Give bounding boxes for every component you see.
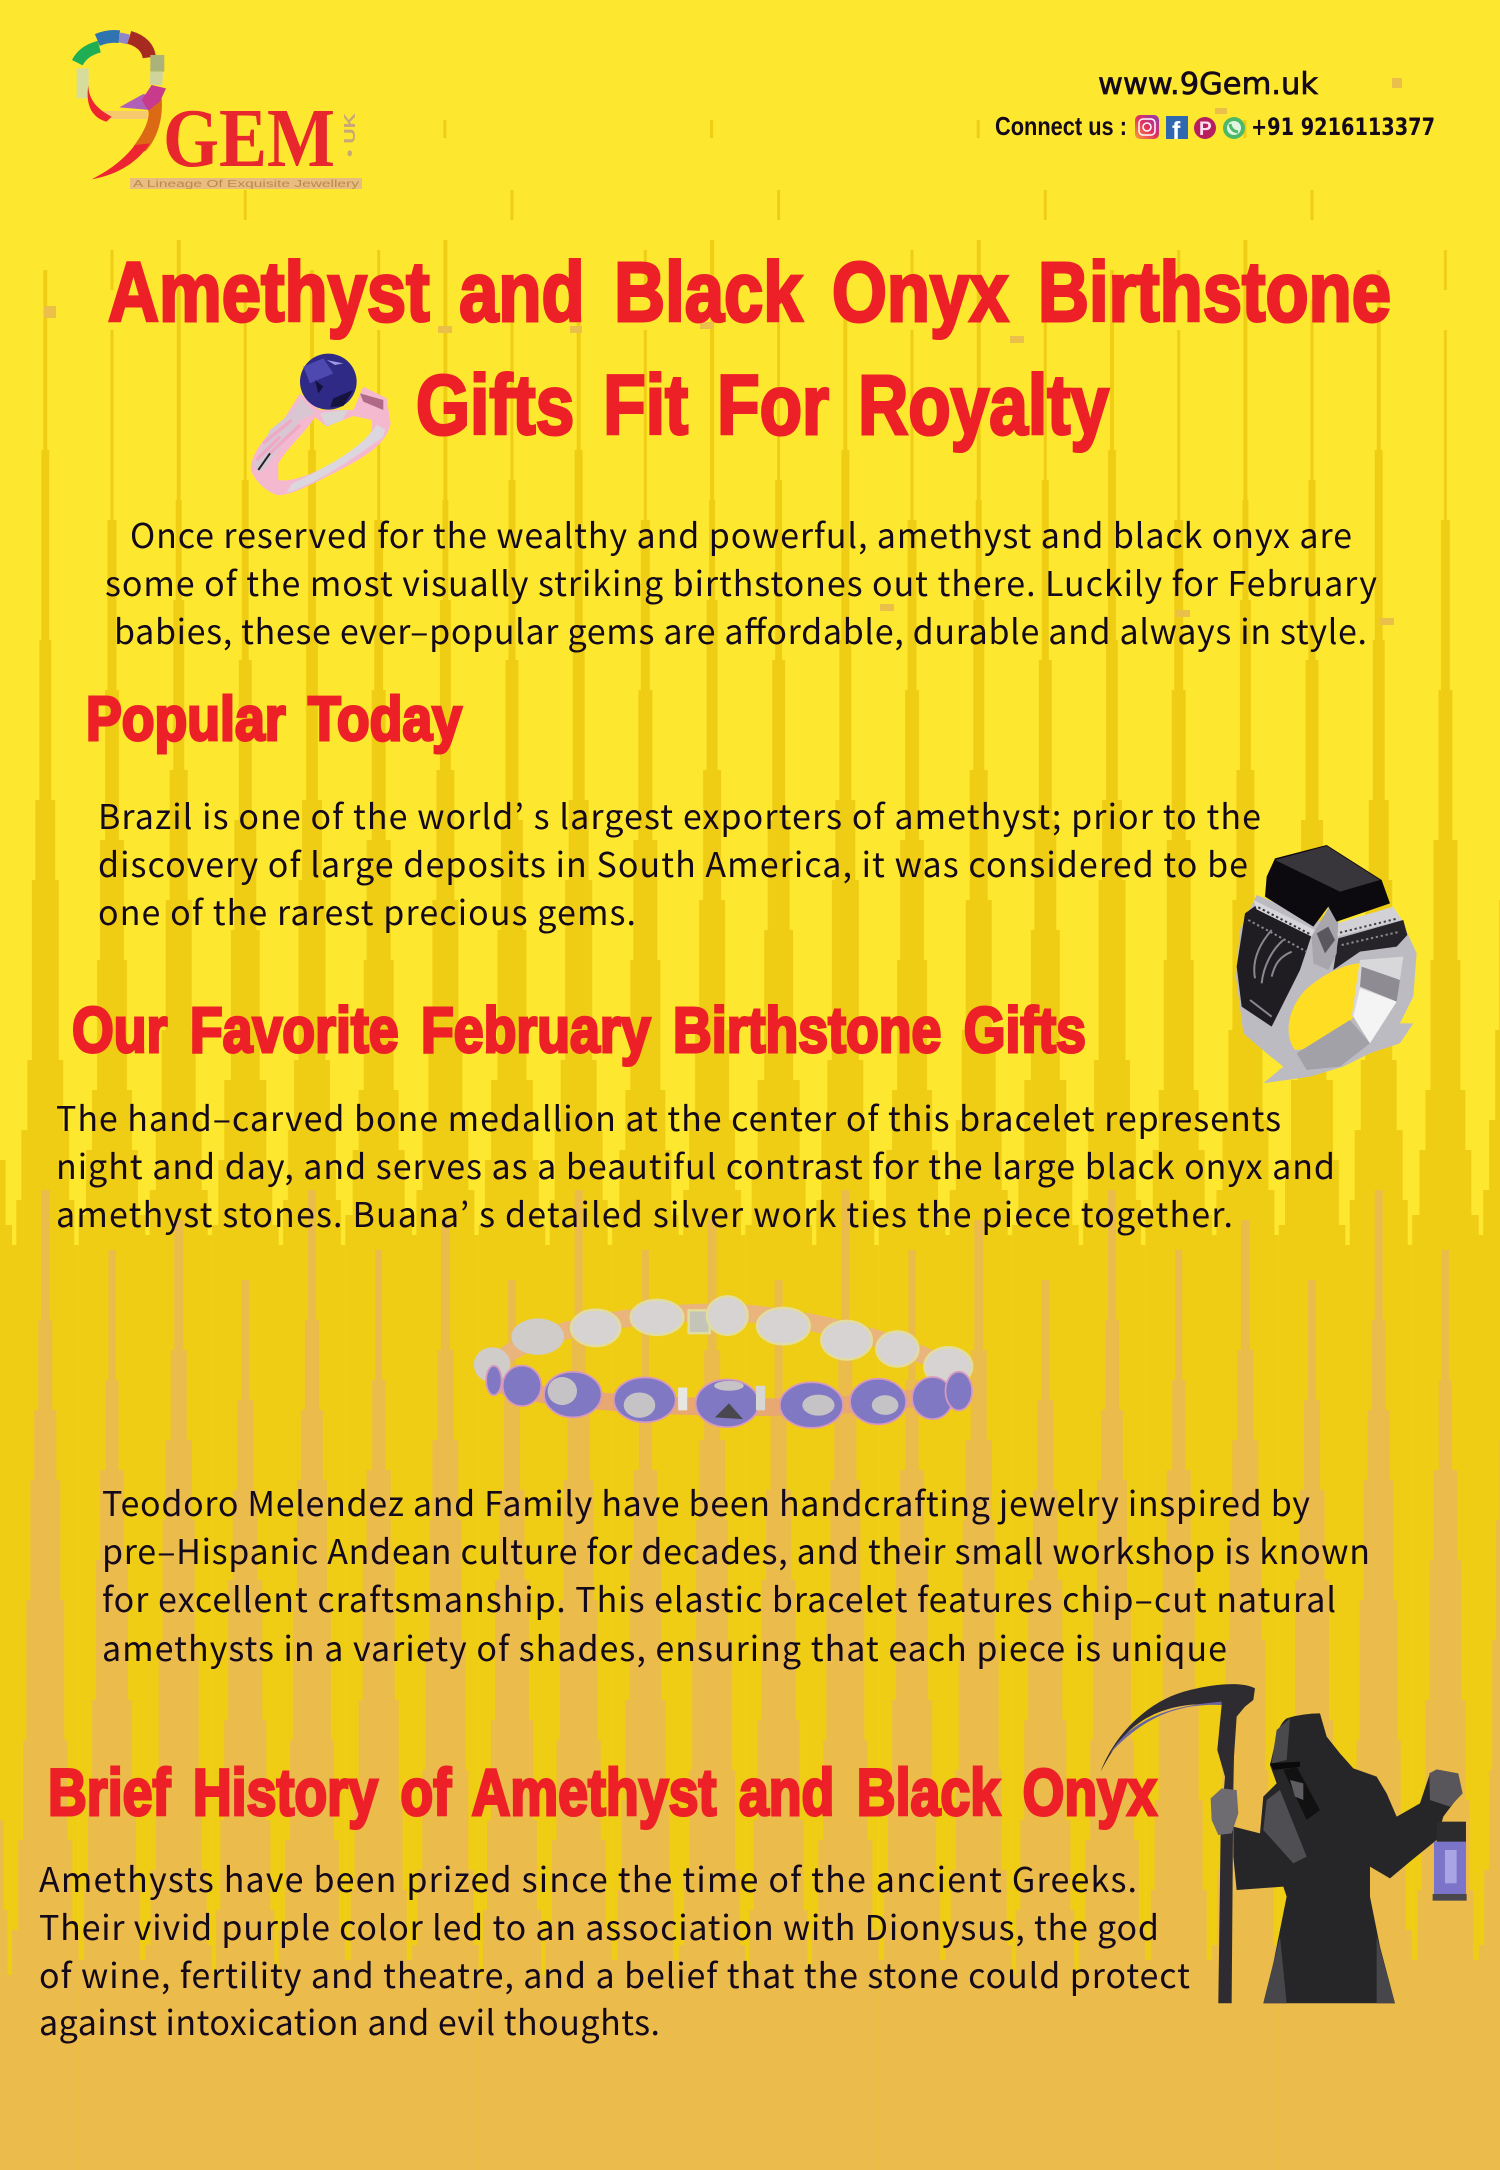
logo tagline strip bbox=[130, 178, 362, 190]
icon: whatsapp bbox=[1223, 117, 1245, 139]
icon: pinterest bbox=[1194, 117, 1216, 140]
paragraph: Teodoro Melendez: Teodoro Melendez and Family have been handcrafting jewelry inspired by bbox=[102, 1477, 1310, 1526]
icon: bracelet bbox=[474, 1296, 972, 1428]
paragraph: Teodoro Melendez: amethysts in a variety of shades, ensuring that each piece is unique bbox=[102, 1622, 1227, 1671]
intro paragraph bbox=[105, 509, 1377, 654]
paragraph: Amethysts history bbox=[39, 1853, 1190, 2045]
paragraph: Amethysts history: against intoxication and evil thoughts. bbox=[39, 1996, 660, 2045]
paragraph: Brazil: Brazil is one of the world’ s largest exporters of amethyst; prior to the bbox=[98, 790, 1261, 839]
lantern hand bbox=[1429, 1769, 1463, 1807]
heading: Popular Today: Popular Today bbox=[86, 685, 462, 754]
heading: Our Favorite February Birthstone Gifts: Our Favorite February Birthstone Gifts bbox=[72, 994, 1086, 1066]
logo wordmark: GEM bbox=[163, 92, 335, 185]
paragraph: hand-carved bracelet bbox=[56, 1092, 1335, 1237]
paragraph: hand-carved bracelet: amethyst stones. Buana’ s detailed silver work ties the piece together. bbox=[56, 1188, 1233, 1237]
icon: pinterest: P bbox=[1199, 119, 1212, 140]
paragraph: Teodoro Melendez bbox=[102, 1477, 1370, 1671]
logo suffix: • UK bbox=[342, 112, 359, 157]
paragraph: Teodoro Melendez: pre–Hispanic Andean culture for decades, and their small workshop is known bbox=[102, 1525, 1370, 1574]
phone number: +91 9216113377 bbox=[1251, 113, 1435, 141]
icon: instagram bbox=[1135, 115, 1159, 139]
title bbox=[108, 245, 1391, 452]
paragraph: Brazil bbox=[98, 790, 1261, 935]
icon: facebook bbox=[1166, 116, 1188, 145]
intro paragraph: babies, these ever–popular gems are affordable, durable and always in style. bbox=[114, 605, 1367, 654]
hooded robe bbox=[1233, 1713, 1462, 2003]
intro paragraph: some of the most visually striking birthstones out there. Luckily for February bbox=[105, 557, 1377, 606]
heading: Brief History: Brief History of Amethyst and Black Onyx bbox=[48, 1755, 1157, 1829]
scythe bbox=[1101, 1684, 1255, 2003]
icon: grim reaper bbox=[1101, 1684, 1467, 2003]
title: Gifts Fit For Royalty bbox=[416, 358, 1109, 452]
website: www.9Gem.uk bbox=[1098, 67, 1319, 102]
paragraph: hand-carved bracelet: The hand–carved bone medallion at the center of this bracelet represents bbox=[56, 1092, 1281, 1141]
logo nine: ring of coloured segments with tail bbox=[77, 36, 166, 179]
paragraph: Amethysts history: of wine, fertility and theatre, and a belief that the stone could protect bbox=[39, 1949, 1190, 1998]
icon: facebook: f bbox=[1172, 117, 1181, 145]
logo: 9GEM bbox=[77, 36, 362, 190]
lantern bbox=[1433, 1822, 1467, 1901]
icon: black onyx ring bbox=[1236, 845, 1417, 1083]
icon: amethyst ring bbox=[251, 354, 391, 495]
paragraph: Amethysts history: Their vivid purple color led to an association with Dionysus, the god bbox=[39, 1901, 1159, 1950]
paragraph: Brazil: discovery of large deposits in South America, it was considered to be bbox=[98, 838, 1248, 887]
connect label: Connect us : bbox=[995, 111, 1127, 141]
logo tagline strip: A Lineage Of Exquisite Jewellery bbox=[133, 179, 359, 190]
paragraph: Amethysts history: Amethysts have been prized since the time of the ancient Greeks. bbox=[39, 1853, 1137, 1902]
contact block bbox=[995, 67, 1435, 145]
paragraph: Brazil: one of the rarest precious gems. bbox=[98, 886, 636, 935]
intro paragraph: Once reserved for the wealthy and powerful, amethyst and black onyx are bbox=[130, 509, 1352, 558]
paragraph: Teodoro Melendez: for excellent craftsmanship. This elastic bracelet features chip–cut natural bbox=[102, 1573, 1336, 1622]
paragraph: hand-carved bracelet: night and day, and serves as a beautiful contrast for the large black onyx and bbox=[56, 1140, 1335, 1189]
skeletal hand on scythe bbox=[1211, 1788, 1238, 1835]
